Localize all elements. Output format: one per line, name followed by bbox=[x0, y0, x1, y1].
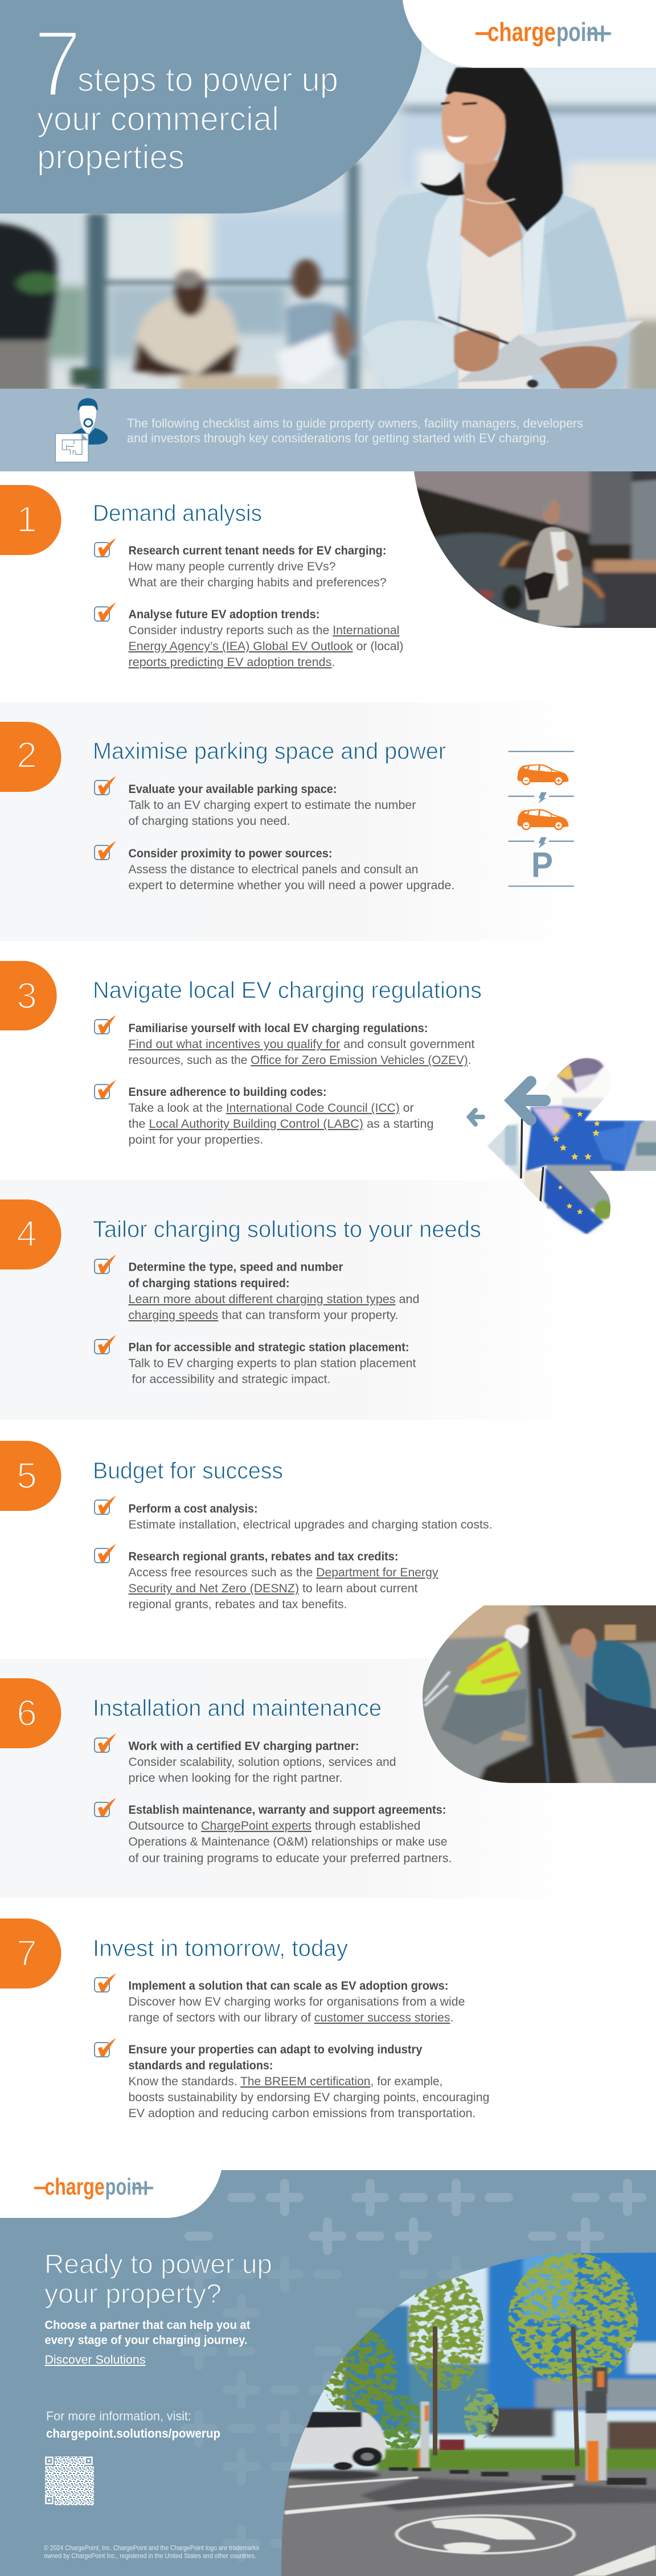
checklist item: Access free resources such as the Department for Energy bbox=[129, 1566, 438, 1579]
hero title panel bbox=[0, 0, 423, 213]
number badge 4 bbox=[0, 1199, 62, 1269]
checklist item: Consider industry reports such as the International bbox=[129, 623, 399, 637]
checklist item: regional grants, rebates and tax benefits. bbox=[129, 1597, 347, 1611]
checklist item: Consider proximity to power sources: bbox=[129, 847, 333, 860]
hero title bbox=[34, 11, 338, 176]
more information link: chargepoint.solutions/powerup bbox=[46, 2426, 220, 2441]
step 6: installation and maintenance bbox=[0, 1592, 656, 1898]
number badge 6 bbox=[0, 1678, 61, 1748]
checklist item: Plan for accessible and strategic station placement: bbox=[129, 1341, 409, 1354]
heading: Demand analysis bbox=[93, 500, 262, 526]
step 7: invest in tomorrow bbox=[0, 1918, 490, 2120]
logo panel: top right bbox=[403, 0, 656, 68]
checklist item: reports predicting EV adoption trends. bbox=[129, 655, 335, 669]
checklist item bbox=[95, 2038, 490, 2120]
more information link: For more information, visit: bbox=[46, 2409, 191, 2423]
number badge 6: 6 bbox=[17, 1692, 37, 1733]
number badge 3: 3 bbox=[17, 975, 37, 1016]
more information link bbox=[46, 2409, 220, 2441]
icon: parking bays with EVs bbox=[509, 751, 574, 886]
step 1: demand analysis bbox=[0, 460, 656, 669]
footer panel bbox=[0, 2170, 656, 2576]
checklist item: for accessibility and strategic impact. bbox=[132, 1372, 330, 1386]
checklist item: standards and regulations: bbox=[129, 2059, 273, 2072]
ChargePoint logo: poin bbox=[105, 2174, 142, 2200]
checklist item: Ensure adherence to building codes: bbox=[129, 1086, 327, 1099]
checklist item: Estimate installation, electrical upgrades and charging station costs. bbox=[129, 1518, 492, 1531]
number badge 4: 4 bbox=[17, 1213, 37, 1254]
checklist item: the Local Authority Building Control (LABC) as a starting bbox=[129, 1117, 434, 1131]
number badge 1: 1 bbox=[17, 499, 37, 540]
ChargePoint logo: charge bbox=[487, 17, 556, 47]
checklist item: Security and Net Zero (DESNZ) to learn about current bbox=[129, 1581, 418, 1595]
footer heading: Ready to power up bbox=[44, 2249, 272, 2279]
checklist item: Assess the distance to electrical panels and consult an bbox=[129, 862, 418, 876]
checklist item: Research current tenant needs for EV charging: bbox=[129, 544, 386, 557]
checklist item bbox=[95, 1973, 465, 2024]
checklist item: price when looking for the right partner. bbox=[129, 1771, 343, 1785]
checklist item: Perform a cost analysis: bbox=[129, 1502, 257, 1515]
number badge 3 bbox=[0, 961, 57, 1030]
intro band bbox=[0, 389, 656, 471]
checklist item: Analyse future EV adoption trends: bbox=[129, 608, 320, 621]
arrow: small left arrow bbox=[469, 1110, 483, 1124]
checklist item: range of sectors with our library of customer success stories. bbox=[129, 2011, 453, 2024]
number badge 7 bbox=[0, 1918, 62, 1989]
footer call to action: every stage of your charging journey. bbox=[44, 2334, 247, 2347]
heading: Maximise parking space and power bbox=[93, 738, 446, 764]
heading: Installation and maintenance bbox=[93, 1695, 382, 1721]
number badge 1 bbox=[0, 485, 62, 555]
step 2: parking space and power bbox=[0, 702, 656, 941]
arrow: large left arrow bbox=[512, 1082, 545, 1120]
checklist item: Find out what incentives you qualify for and consult government bbox=[129, 1037, 475, 1051]
heading: Budget for success bbox=[93, 1457, 283, 1484]
checklist item: Research regional grants, rebates and tax credits: bbox=[129, 1550, 399, 1563]
checklist item: Establish maintenance, warranty and support agreements: bbox=[129, 1803, 446, 1817]
ChargePoint logo: poin bbox=[556, 17, 598, 47]
checklist item bbox=[95, 1255, 419, 1322]
copyright bbox=[44, 2544, 259, 2559]
photo: workers at a trench bbox=[423, 1605, 656, 1783]
intro text bbox=[127, 416, 583, 445]
footer call to action: Discover Solutions bbox=[44, 2353, 146, 2367]
footer photo: EV chargers in a car park bbox=[268, 2242, 656, 2576]
checklist item: Implement a solution that can scale as EV adoption grows: bbox=[129, 1979, 449, 1992]
footer call to action bbox=[44, 2319, 251, 2367]
checklist item: of our training programs to educate your preferred partners. bbox=[129, 1851, 452, 1865]
checklist item: resources, such as the Office for Zero Emission Vehicles (OZEV). bbox=[129, 1053, 472, 1067]
number badge 2 bbox=[0, 722, 62, 792]
footer heading: your property? bbox=[44, 2278, 222, 2308]
checklist item bbox=[95, 1496, 492, 1531]
checklist item bbox=[95, 1080, 434, 1147]
copyright: owned by ChargePoint Inc., registered in the United States and other countries. bbox=[44, 2552, 256, 2559]
photo: man charging car bbox=[414, 471, 656, 628]
step 5: budget bbox=[0, 1441, 492, 1611]
checklist item: of charging stations required: bbox=[129, 1277, 289, 1290]
heading: Tailor charging solutions to your needs bbox=[93, 1216, 481, 1242]
number badge 5: 5 bbox=[17, 1455, 37, 1496]
photo: EU flags in arrow shape bbox=[469, 1053, 656, 1243]
icon: parking bays with EVs: P bbox=[531, 846, 553, 885]
number badge 2: 2 bbox=[17, 734, 37, 775]
checklist item: Discover how EV charging works for organisations from a wide bbox=[129, 1995, 465, 2008]
checklist item: Talk to an EV charging expert to estimate the number bbox=[129, 798, 416, 812]
checklist item bbox=[95, 776, 416, 828]
intro text: and investors through key considerations for getting started with EV charging. bbox=[127, 431, 550, 445]
checklist item: Determine the type, speed and number bbox=[129, 1260, 343, 1274]
step 4: tailor solutions bbox=[0, 1180, 656, 1420]
hero photo: woman with clipboard in an office bbox=[0, 42, 656, 389]
checklist item bbox=[95, 1798, 452, 1865]
number badge 5 bbox=[0, 1441, 62, 1511]
step 3: regulations bbox=[0, 961, 482, 1147]
checklist item bbox=[95, 602, 403, 669]
ChargePoint logo bbox=[477, 17, 610, 47]
number badge 7: 7 bbox=[17, 1933, 37, 1974]
heading: Navigate local EV charging regulations bbox=[93, 977, 482, 1003]
heading: Invest in tomorrow, today bbox=[93, 1935, 348, 1961]
checklist item: Energy Agency’s (IEA) Global EV Outlook or (local) bbox=[129, 639, 403, 653]
checklist item: boosts sustainability by endorsing EV charging points, encouraging bbox=[129, 2090, 490, 2104]
ChargePoint logo: charge bbox=[44, 2174, 105, 2200]
checklist item bbox=[95, 538, 387, 589]
checklist item bbox=[95, 1544, 438, 1611]
checklist item: Operations & Maintenance (O&M) relationships or make use bbox=[129, 1835, 448, 1848]
footer logo panel bbox=[0, 2170, 222, 2218]
checklist item: Consider scalability, solution options, services and bbox=[129, 1755, 396, 1769]
ChargePoint logo bbox=[35, 2174, 152, 2200]
checklist item: expert to determine whether you will need a power upgrade. bbox=[129, 878, 454, 892]
checklist item: Outsource to ChargePoint experts through established bbox=[129, 1819, 420, 1833]
checklist item: Take a look at the International Code Council (ICC) or bbox=[129, 1101, 413, 1115]
intro text: The following checklist aims to guide property owners, facility managers, developers bbox=[127, 416, 583, 430]
checklist item: EV adoption and reducing carbon emissions from transportation. bbox=[129, 2106, 476, 2120]
checklist item: Learn more about different charging station types and bbox=[129, 1292, 419, 1306]
checklist item bbox=[95, 1015, 475, 1067]
checklist item bbox=[95, 1335, 416, 1386]
hero title: properties bbox=[37, 138, 184, 176]
checklist item: Talk to EV charging experts to plan station placement bbox=[129, 1356, 416, 1370]
checklist item bbox=[95, 1733, 396, 1785]
copyright: © 2024 ChargePoint, Inc. ChargePoint and the ChargePoint logo are trademarks bbox=[44, 2544, 259, 2552]
checklist item: of charging stations you need. bbox=[129, 814, 290, 828]
checklist item: What are their charging habits and preferences? bbox=[129, 576, 387, 589]
hero title: 7 bbox=[34, 11, 81, 117]
plus and minus background pattern bbox=[184, 2183, 642, 2558]
hero title: steps to power up bbox=[77, 61, 338, 98]
checklist item: Ensure your properties can adapt to evolving industry bbox=[129, 2043, 423, 2056]
checklist item: Work with a certified EV charging partner: bbox=[129, 1740, 359, 1753]
icon: property manager with floor plan bbox=[55, 398, 108, 462]
footer call to action: Choose a partner that can help you at bbox=[44, 2319, 251, 2332]
checklist item bbox=[95, 841, 454, 892]
checklist item: Evaluate your available parking space: bbox=[129, 783, 337, 796]
hero title: your commercial bbox=[37, 100, 279, 138]
QR code bbox=[45, 2456, 94, 2505]
checklist item: Know the standards. The BREEM certification, for example, bbox=[129, 2074, 442, 2088]
checklist item: point for your properties. bbox=[129, 1133, 263, 1147]
checklist item: Familiarise yourself with local EV charging regulations: bbox=[129, 1022, 428, 1035]
footer heading bbox=[44, 2249, 272, 2308]
checklist item: charging speeds that can transform your property. bbox=[129, 1308, 399, 1322]
checklist item: How many people currently drive EVs? bbox=[129, 560, 336, 573]
